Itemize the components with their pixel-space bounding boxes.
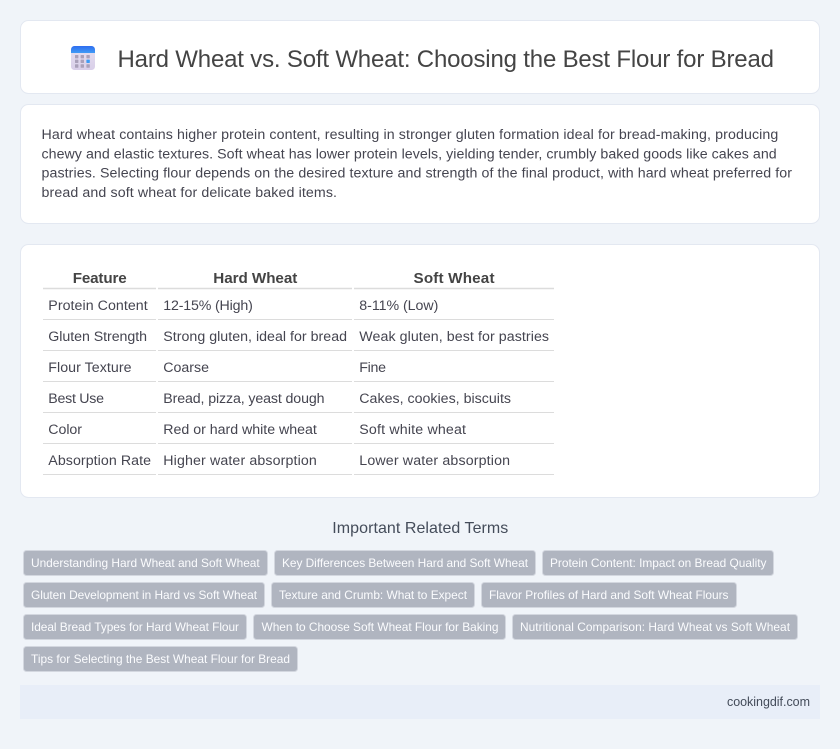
row: flour texture xyxy=(43,360,554,382)
tag: protein content: Protein Content: Impact on Bread Quality xyxy=(550,556,767,570)
row: best use xyxy=(43,391,554,412)
row: absorption rate: Absorption Rate xyxy=(48,453,151,469)
row: protein content: 12-15% (High) xyxy=(163,298,253,314)
row: flour texture: Coarse xyxy=(163,360,209,376)
intro text: Hard wheat contains higher protein content, resulting in stronger gluten formation ideal for bread-making, producing xyxy=(42,127,778,143)
row: best use: Best Use xyxy=(48,391,104,407)
row: color: Red or hard white wheat xyxy=(163,422,317,438)
intro text: bread and soft wheat for delicate baked items. xyxy=(42,185,337,201)
row: gluten strength: Strong gluten, ideal for bread xyxy=(163,329,347,345)
row: best use: Cakes, cookies, biscuits xyxy=(359,391,511,407)
tag: understanding: Understanding Hard Wheat and Soft Wheat xyxy=(31,556,260,570)
row: gluten strength: Weak gluten, best for pastries xyxy=(359,329,549,345)
tag: nutritional comparison xyxy=(512,614,798,640)
table header row: Soft Wheat xyxy=(414,270,494,287)
tag: protein content xyxy=(542,550,774,576)
row: protein content: 8-11% (Low) xyxy=(359,298,438,314)
tag: gluten development: Gluten Development in Hard vs Soft Wheat xyxy=(31,588,258,602)
tag: understanding xyxy=(24,550,268,576)
intro text: chewy and elastic textures. Soft wheat has lower protein levels, yielding tender, crumbly baked goods like cakes and xyxy=(42,146,777,162)
table header row: Hard Wheat xyxy=(213,270,297,287)
tag: when to choose xyxy=(254,614,506,640)
row: color: Color xyxy=(48,422,82,438)
panel: header xyxy=(20,20,820,94)
intro text: pastries. Selecting flour depends on the desired texture and strength of the final product, with hard wheat preferred for xyxy=(42,166,792,182)
tag: tips for selecting xyxy=(24,646,298,672)
row: best use: Bread, pizza, yeast dough xyxy=(163,391,324,407)
tag: key differences xyxy=(274,550,536,576)
tag: gluten development xyxy=(24,582,264,608)
row: flour texture: Flour Texture xyxy=(48,360,132,376)
row: absorption rate: Lower water absorption xyxy=(359,453,510,469)
row: absorption rate xyxy=(43,453,554,474)
row: gluten strength: Gluten Strength xyxy=(48,329,147,345)
tag: flavor profiles: Flavor Profiles of Hard and Soft Wheat Flours xyxy=(489,588,729,602)
panel: introduction xyxy=(20,104,820,224)
tag: texture and crumb xyxy=(272,582,474,608)
row: flour texture: Fine xyxy=(359,360,386,376)
row: gluten strength xyxy=(43,329,554,350)
row: absorption rate: Higher water absorption xyxy=(163,453,317,469)
row: protein content: Protein Content xyxy=(48,298,148,314)
row: color xyxy=(43,422,554,444)
row: color: Soft white wheat xyxy=(359,422,466,438)
tag: ideal bread types xyxy=(24,614,246,640)
table header row xyxy=(43,270,554,288)
tag: nutritional comparison: Nutritional Comparison: Hard Wheat vs Soft Wheat xyxy=(520,620,791,634)
title: Hard Wheat vs. Soft Wheat: Choosing the Best Flour for Bread xyxy=(118,46,774,73)
tag: ideal bread types: Ideal Bread Types for Hard Wheat Flour xyxy=(31,620,239,634)
heading: important related terms: Important Related Terms xyxy=(332,520,508,537)
footer source text: cookingdif.com xyxy=(727,695,810,709)
icon: calendar xyxy=(71,46,95,70)
intro text xyxy=(42,127,792,201)
tag: when to choose: When to Choose Soft Wheat Flour for Baking xyxy=(262,620,498,634)
tag: tips for selecting: Tips for Selecting the Best Wheat Flour for Bread xyxy=(31,652,290,666)
panel: comparison table xyxy=(20,244,820,498)
row: protein content xyxy=(43,298,554,320)
footer xyxy=(20,685,820,719)
tag: key differences: Key Differences Between Hard and Soft Wheat xyxy=(282,556,529,570)
tag: texture and crumb: Texture and Crumb: What to Expect xyxy=(279,588,468,602)
table header row: Feature xyxy=(73,270,127,287)
tag: flavor profiles xyxy=(482,582,736,608)
related term tags xyxy=(24,550,798,672)
